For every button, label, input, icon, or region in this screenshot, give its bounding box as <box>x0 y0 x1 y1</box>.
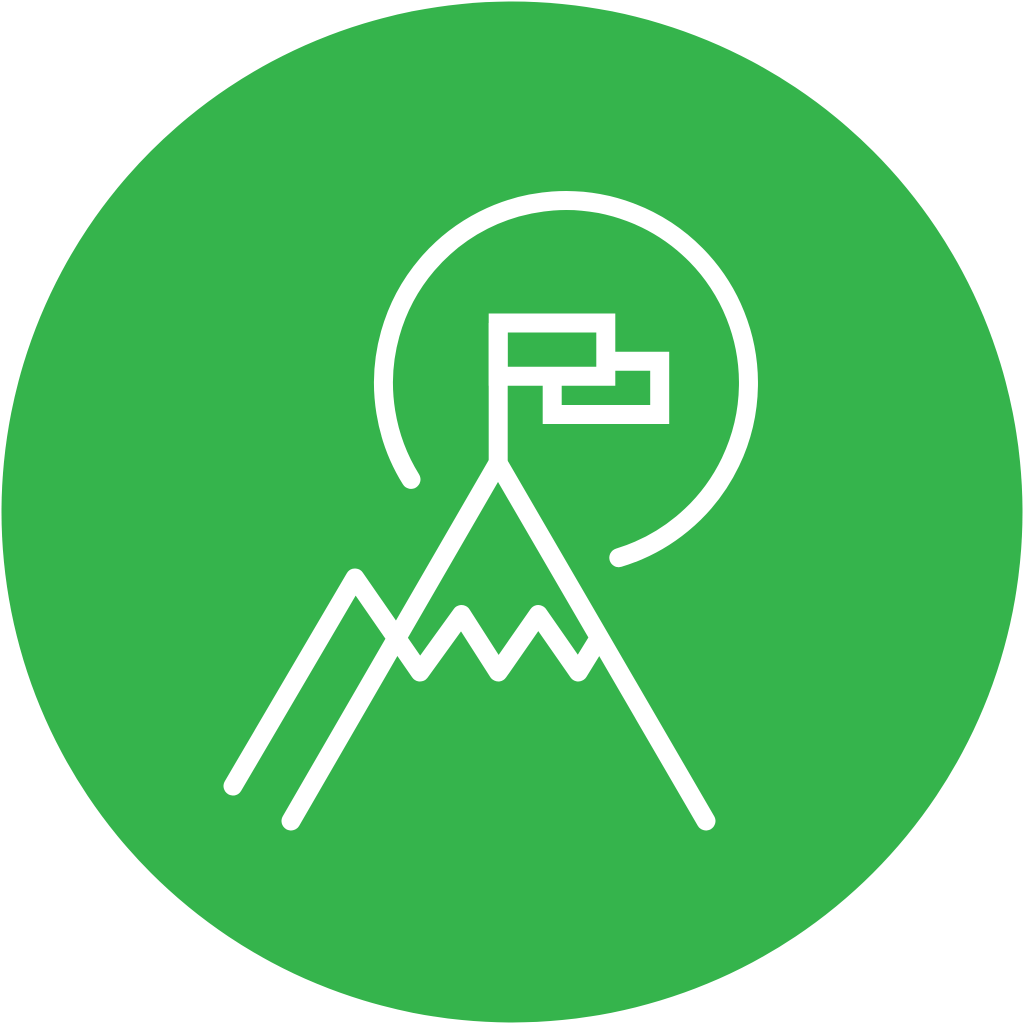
icon: sun arc <box>383 201 748 558</box>
icon: mountain with flag <box>233 201 748 821</box>
icon: left mountain and snow line <box>233 578 598 786</box>
icon: flag <box>498 323 660 465</box>
icon: main mountain <box>291 463 706 821</box>
